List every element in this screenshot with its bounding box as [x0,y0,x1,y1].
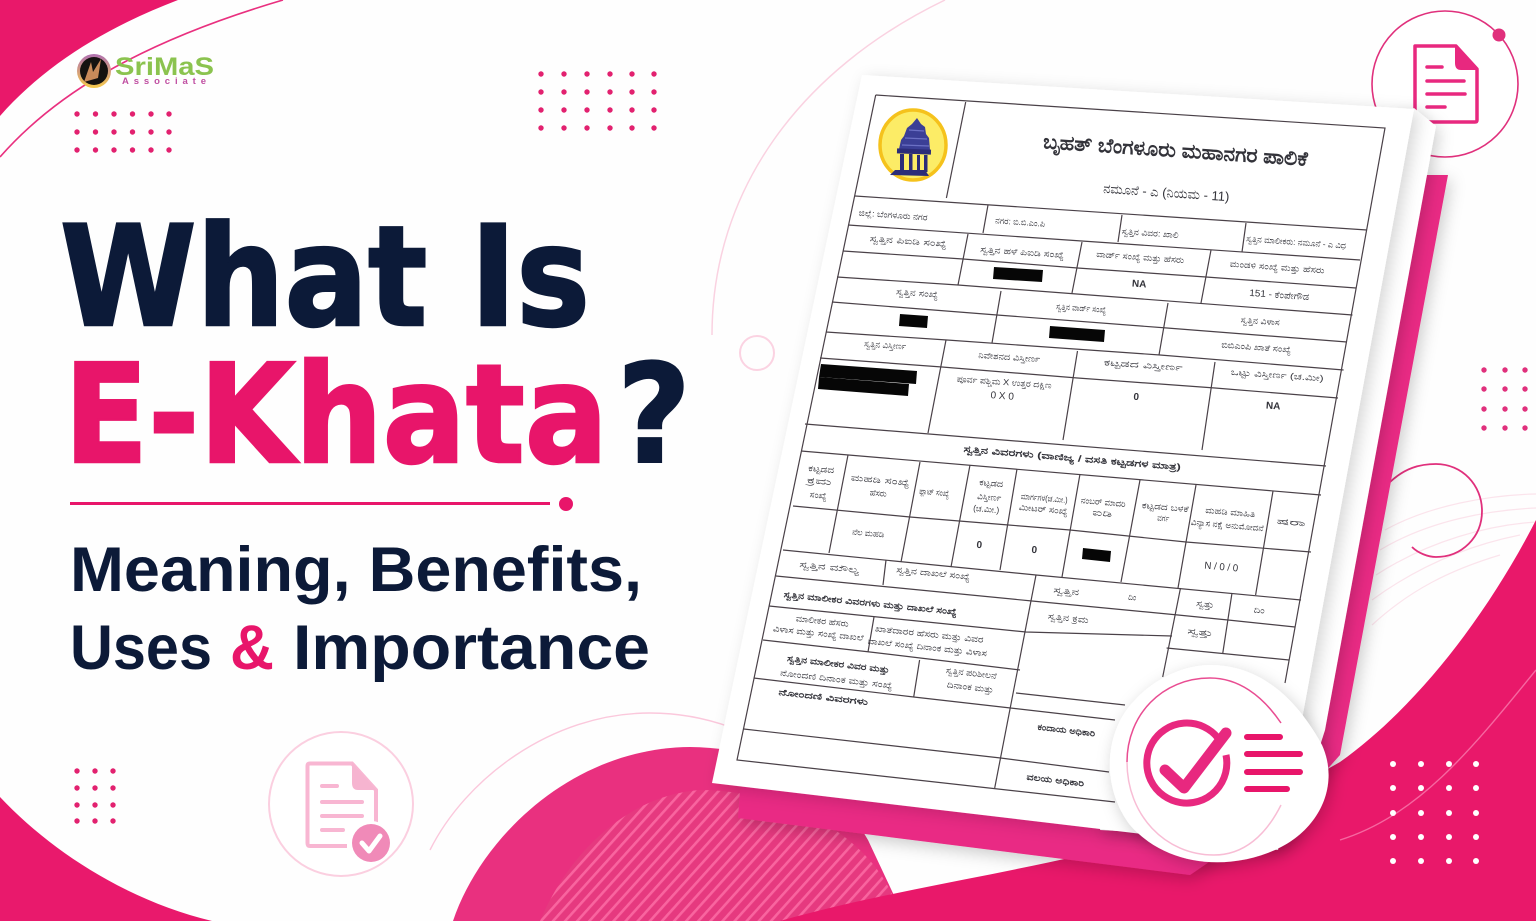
subtitle line 2: & [230,613,274,683]
redaction bars [818,267,1111,562]
form values: NA [1132,279,1147,290]
form cell labels: ದಿಂ [1253,604,1266,616]
form cell labels: ಜಿಲ್ಲೆ: ಬೆಂಗಳೂರು ನಗರ [858,208,928,223]
form values [976,279,1309,575]
form cell labels [772,208,1347,788]
large thin arc beside title [712,0,945,335]
form cell labels: ಸ್ವತ್ತಿನ ವಿವರ: ಖಾಲಿ [1121,226,1180,241]
icon: list lines [1247,737,1300,789]
bottom-right pink shape [780,520,1536,921]
form cell labels: ಬಿಬಿಎಂಪಿ ಖಾತೆ ಸಂಖ್ಯೆ [1221,340,1292,356]
form cell labels: ದಿಂ [1128,592,1137,602]
form grid lines [737,95,1385,802]
form cell labels: ಮಹಡಿ ಸಂಖ್ಯೆ [850,472,911,489]
check badge [1110,665,1329,862]
dot grid: bottom right white [1390,761,1479,864]
dot grid: top centre [538,71,657,131]
form cell labels: ಸಂಖ್ಯೆ [809,489,828,503]
form cell labels: ಸ್ವತ್ತಿನ [1053,585,1080,599]
faint contour lines [1372,494,1536,625]
form cell labels: ಪೂರ್ವ ಪಶ್ಚಿಮ X ಉತ್ತರ ದಕ್ಷಿಣ [956,374,1052,392]
form cell labels: ಸ್ವತ್ತಿನ ಪರಿಶೀಲನೆ [945,665,998,682]
form cell labels: ಕಂದಾಯ ಅಧಿಕಾರಿ [1037,722,1096,738]
divider [70,497,573,511]
form cell labels: ಸ್ವತ್ತಿನ ಮಾಲೀಕರ ವಿವರ ಮತ್ತು [786,653,890,677]
thin arc above centre blob [430,713,730,850]
pink backing sheet [738,175,1448,875]
form cell labels: ಸ್ವತ್ತಿನ ದಾಖಲೆ ಸಂಖ್ಯೆ [896,564,971,583]
form cell labels: ವಲಯ ಅಧಿಕಾರಿ [1026,772,1085,788]
form cell labels: ಸ್ವತ್ತಿನ ಹಳೆ ಪಿಐಡಿ ಸಂಖ್ಯೆ [980,244,1065,262]
form cell labels: ನಿವೇಶನದ ವಿಸ್ತೀರ್ಣ [978,350,1041,364]
form values: NA [1266,401,1281,412]
form values: 0 [1031,545,1038,556]
form cell labels: ವಿಳಾಸ ಮತ್ತು ಸಂಖ್ಯೆ ದಾಖಲೆ [772,623,865,645]
form cell labels: ನಗರ: ಬಿ.ಬಿ.ಎಂ.ಪಿ [995,215,1046,229]
form cell labels: ಸ್ವತ್ತಿನ ವಿವರಗಳು (ವಾಣಿಜ್ಯ / ವಸತಿ ಕಟ್ಟಡಗಳ ಮಾತ್ರ) [963,444,1181,475]
title line 2: ? [617,336,691,495]
centre pink blob with striped area [453,747,906,921]
form values: 151 - ಕೆಂಪೇಗೌಡ [1249,288,1309,303]
logo tagline: Associate [122,76,206,87]
subtitle line 1: Meaning, Benefits, [70,535,642,605]
form cell labels: ಫ್ಲಾಟ್ ಸಂಖ್ಯೆ [919,486,950,500]
dot grid: bottom left [74,768,116,824]
form cell labels: ವಿಸ್ತೀರ್ಣ [977,491,1002,503]
form cell labels: ಹೆಸರು [869,487,887,499]
pale arc on pink shape [1340,670,1536,840]
document [712,75,1414,850]
form cell labels: ಕಟ್ಟಡದ ಬಳಕೆ [1141,500,1190,515]
dot grid: right [1481,367,1528,431]
paper [712,75,1414,850]
form cell labels: ಮಹಡಿ ಮಾಹಿತಿ [1205,505,1256,519]
form cell labels: ಸ್ವತ್ತಿನ ವಾರ್ಡ್ ಸಂಖ್ಯೆ [1056,301,1107,317]
form cell labels: ಷರಾ [1276,516,1306,528]
form cell labels: ಸ್ವತ್ತು [1187,626,1214,640]
form cell labels: ನಂಬರ್ ಮಾದರಿ [1080,495,1127,509]
second white sheet [1100,108,1436,840]
form cell labels: ಸ್ವತ್ತಿನ ವಿಸ್ತೀರ್ಣ [864,339,907,353]
form cell labels: ಸ್ವತ್ತು [1196,598,1215,611]
form values: 0 [976,540,983,551]
dot grid: top left [74,111,172,153]
title line 2: E-Khata [64,336,608,495]
form cell labels: ಸ್ವತ್ತಿನ ಮಾಲೀಕರು: ನಮೂನೆ - ಎ ವಿಧ [1246,234,1347,252]
form cell labels: ಖಾತೆದಾರರ ಹೆಸರು ಮತ್ತು ವಿವರ [875,623,985,645]
form cell labels: ಸ್ವತ್ತಿನ ಸಂಖ್ಯೆ [896,287,939,301]
title line 1: What Is [60,196,590,358]
form cell labels: ಒಟ್ಟು ವಿಸ್ತೀರ್ಣ (ಚ.ಮೀ) [1230,367,1324,385]
icon: pale document with check [269,732,413,876]
subtitle line 2: Importance [293,613,650,683]
top-left thin arc [0,0,283,157]
form cell labels: ದಿನಾಂಕ ಮತ್ತು [946,679,994,695]
form cell labels: ಸ್ವತ್ತಿನ ವಿಳಾಸ [1240,315,1281,329]
form values: 0 X 0 [990,390,1015,403]
form cell labels: ದಾಖಲೆ ಸಂಖ್ಯೆ ದಿನಾಂಕ ಮತ್ತು ವಿಳಾಸ [867,636,988,660]
form cell labels: ಕ್ರಮ [803,475,834,488]
form cell labels: ಐಡಿ [1092,507,1114,519]
subtitle line 2 [70,613,650,683]
form subheading: ನಮೂನೆ - ಎ (ನಿಯಮ - 11) [1103,181,1230,204]
form cell labels: ಮಂಡಳಿ ಸಂಖ್ಯೆ ಮತ್ತು ಹೆಸರು [1229,259,1325,277]
form cell labels: ಕಟ್ಟಡದ ವಿಸ್ತೀರ್ಣ [1103,357,1184,374]
emblem [880,110,946,180]
form values: 0 [1133,392,1140,403]
form cell labels: ಮಾಲೀಕರ ಹೆಸರು [795,613,850,629]
form cell labels: ನೋಂದಣಿ ದಿನಾಂಕ ಮತ್ತು ಸಂಖ್ಯೆ [779,668,894,692]
open pink ring on right [1390,464,1482,557]
form cell labels: ಸ್ವತ್ತಿನ ಮಾಲೀಕರ ವಿವರಗಳು ಮತ್ತು ದಾಖಲೆ ಸಂಖ್ಯೆ [783,589,958,620]
form cell labels: ಕಟ್ಟಡದ [979,477,1004,490]
form cell labels: ವಾರ್ಡ್ ಸಂಖ್ಯೆ ಮತ್ತು ಹೆಸರು [1096,249,1185,267]
badge blob [1110,665,1329,862]
form cell labels: ಸ್ವತ್ತಿನ ಮೌಲ್ಯ [799,559,861,577]
subtitle line 2: Uses [70,613,212,683]
form cell labels: ವಿನ್ಯಾಸ ನಕ್ಷೆ ಅನುಮೋದನೆ [1190,517,1265,535]
logo wordmark: SriMaS [115,53,214,81]
form cell labels: ಕಟ್ಟಡದ [808,463,835,476]
form cell labels: ನೆಲ ಮಹಡಿ [852,527,885,539]
form values: N / 0 / 0 [1204,561,1239,575]
form cell labels: ಮಾರ್ಗಗಳ(ಚ.ಮೀ.) [1020,491,1068,505]
icon: top-right document [1372,11,1518,157]
bottom-left pink shape [0,797,212,921]
form cell labels: ನೋಂದಣಿ ವಿವರಗಳು [778,687,869,707]
icon: ring with check mark [1147,723,1227,803]
form cell labels: ಸ್ವತ್ತಿನ ಪಿಐಡಿ ಸಂಖ್ಯೆ [869,233,948,250]
logo badge [77,54,111,88]
logo [77,53,214,88]
form cell labels: ಸ್ವತ್ತಿನ ಕ್ರಮ [1047,611,1090,626]
form cell labels: ವರ್ಗ [1157,513,1170,524]
form heading: ಬೃಹತ್ ಬೆಂಗಳೂರು ಮಹಾನಗರ ಪಾಲಿಕೆ [1042,131,1310,173]
badge thin ring [1127,678,1281,855]
form cell labels: ಮೀಟರ್ ಸಂಖ್ಯೆ [1018,502,1069,518]
form cell labels: (ಚ.ಮೀ.) [973,503,1000,515]
small pale ring [740,336,774,370]
top-left pink corner shape [0,0,178,116]
